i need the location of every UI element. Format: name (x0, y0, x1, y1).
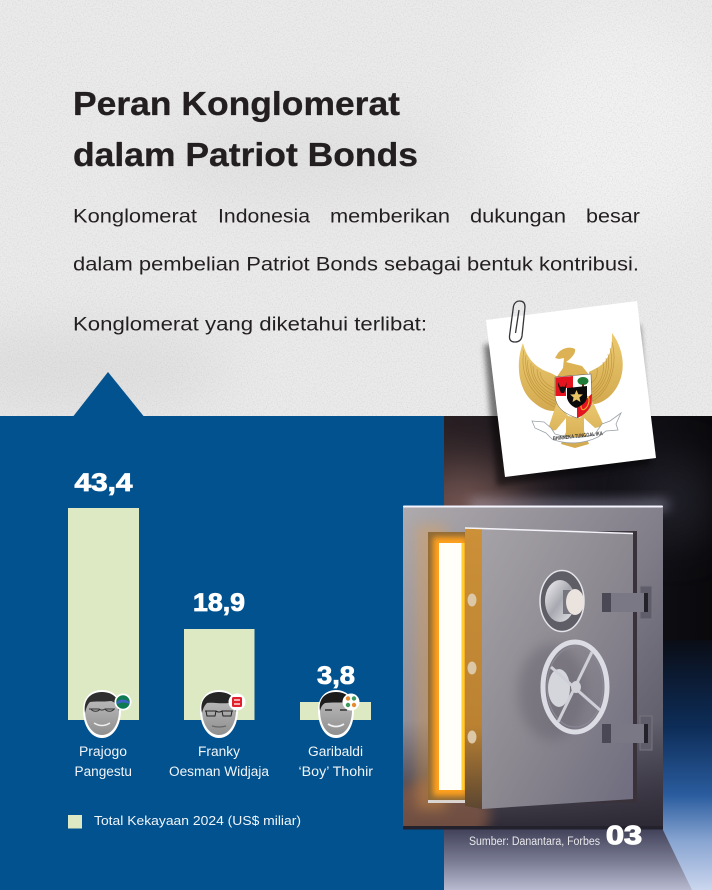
wheel shadow (518, 644, 586, 740)
glowing slot (433, 537, 467, 796)
legend: Total Kekayaan 2024 (US$ miliar) (94, 813, 301, 828)
bar: Franky Oesman Widjaja (184, 629, 254, 720)
bar: Garibaldi Boy Thohir (300, 702, 371, 720)
safe glow (470, 500, 668, 510)
portrait: Prajogo Pangestu (83, 690, 132, 738)
value labels: 18,9 (193, 589, 245, 617)
portrait: Franky Oesman Widjaja (200, 690, 246, 738)
blue panel (0, 372, 444, 890)
safe body (403, 506, 663, 826)
intro text: besar (586, 206, 641, 228)
combination dial (540, 570, 584, 632)
names: Oesman Widjaja (169, 764, 269, 779)
note card with garuda (484, 301, 656, 486)
intro text: dukungan (470, 206, 566, 228)
door side edge (465, 528, 482, 809)
door front (482, 529, 633, 809)
names (74, 744, 374, 779)
emblem: garuda (519, 333, 623, 448)
neck and head (555, 348, 590, 378)
hand wheel (543, 642, 607, 732)
shield (555, 374, 592, 418)
names: ‘Boy’ Thohir (298, 764, 374, 779)
value labels: 43,4 (74, 469, 133, 497)
card shadow (484, 325, 650, 486)
title: dalam Patriot Bonds (73, 136, 418, 173)
door frame (428, 531, 637, 803)
illustration: open safe (380, 500, 668, 850)
intro text: Indonesia (218, 206, 310, 228)
title: Peran Konglomerat (73, 85, 400, 122)
card (486, 301, 656, 477)
intro text: Konglomerat (73, 206, 198, 228)
names: Prajogo (79, 744, 127, 759)
tail and legs (547, 400, 604, 448)
names: Franky (198, 744, 240, 759)
subheading: Konglomerat yang diketahui terlibat: (73, 314, 427, 336)
intro text (73, 206, 641, 276)
names: Garibaldi (308, 744, 363, 759)
hinge top (602, 586, 652, 619)
banner: BHINNEKA TUNGGAL IKA (553, 431, 603, 442)
paperclip (509, 301, 525, 342)
portrait: Garibaldi Boy Thohir (318, 690, 360, 738)
dark photo panel (444, 416, 712, 890)
title (73, 85, 418, 173)
value labels (74, 469, 355, 690)
names: Pangestu (74, 764, 132, 779)
intro text: memberikan (330, 206, 450, 228)
source: Sumber: Danantara, Forbes (469, 836, 600, 848)
value labels: 3,8 (317, 662, 355, 690)
paper texture background (0, 0, 712, 416)
wings (519, 343, 559, 411)
bar: Prajogo Pangestu (68, 508, 139, 720)
bar chart (68, 469, 371, 720)
intro text: dalam pembelian Patriot Bonds sebagai bentuk kontribusi. (73, 254, 639, 276)
page number: 03 (606, 820, 642, 850)
door bolts (468, 594, 476, 744)
hinge bottom (602, 716, 652, 750)
